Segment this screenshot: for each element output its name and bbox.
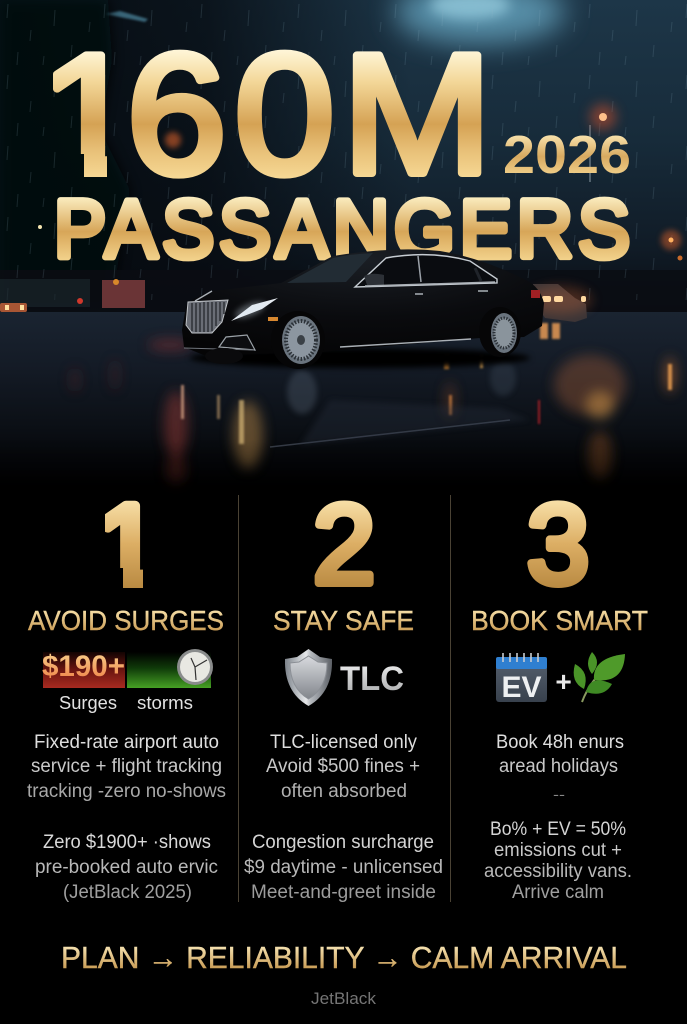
title: 160M: 1 [40,19,140,210]
text block: licensed only: Avoid $500 fines + [266,756,420,777]
label: tlc: TLC [340,660,404,698]
text block: congestion surcharge: Meet-and-greet inside [251,882,436,903]
text block: zero shows [35,832,218,903]
text block: zero shows: (JetBlack 2025) [63,882,192,903]
number 3: 3 [527,482,589,607]
text block: congestion surcharge [244,832,443,903]
panel: book smart [471,482,648,903]
text block: book ahead: Book 48h enurs [496,732,624,753]
title: 2026: 2026 [503,125,631,185]
car body [182,249,544,356]
text block: fixed-rate service: tracking -zero no-shows [27,781,226,802]
icon: calendar ev [496,653,547,704]
side windows [355,255,497,287]
text block: licensed only: TLC-licensed only [270,732,417,753]
headlight [231,298,278,321]
surge bar: $190+ [42,650,125,683]
title: 160M [53,50,482,179]
car shadow [190,348,530,368]
heading: stay safe: STAY SAFE [273,605,414,636]
windscreen [287,253,373,283]
mirror [364,274,384,285]
number 1: 1 [97,482,159,607]
black limousine [182,249,544,369]
text block: emissions [484,819,632,903]
text block: book ahead: aread holidays [499,756,618,777]
text block: zero shows: Zero $1900+ ·shows [43,832,211,853]
column dividers [238,495,450,902]
text block: fixed-rate service [27,732,226,802]
body highlights [195,282,495,347]
title: 160M: 60M [127,19,492,210]
surge bar [42,650,211,688]
text block: fixed-rate service: Fixed-rate airport auto [34,732,219,753]
text block: book ahead: -- [553,786,565,802]
front wheel [271,311,325,369]
rear wheel [479,307,521,357]
heading: avoid surges: AVOID SURGES [28,605,224,636]
title: PASSANGERS: PASSANGERS [54,183,630,274]
label: surges: Surges [59,693,117,713]
icon: leaf [574,652,625,702]
text block: emissions: accessibility vans. [484,861,632,882]
text block: congestion surcharge: $9 daytime - unlicensed [244,857,443,878]
text block: fixed-rate service: service + flight tracking [31,756,222,777]
icon: calendar ev: EV [501,671,542,704]
icon: clock [177,649,213,685]
grille [186,300,228,333]
background car with headlights [528,284,592,322]
label: storms: storms [137,693,193,713]
text block: emissions: Arrive calm [512,882,604,903]
heading: book smart: BOOK SMART [471,605,648,636]
text block: licensed only [266,732,420,802]
panel: stay safe [244,482,443,903]
icon: shield [285,649,332,706]
text block: book ahead [496,732,624,802]
text block: zero shows: pre-booked auto ervic [35,857,218,878]
far front wheel [205,348,243,364]
number 2: 2 [313,482,375,607]
plus sign: + [555,666,572,697]
text block: emissions: Bo% + EV = 50% [490,819,626,840]
lower intake [219,335,255,350]
brand footer: JetBlack [311,989,377,1008]
tagline: PLAN → RELIABILITY → CALM ARRIVAL [61,940,627,975]
text block: emissions: emissions cut + [494,840,622,861]
panel: avoid surges [27,482,226,903]
text block: licensed only: often absorbed [281,781,407,802]
text block: congestion surcharge: Congestion surcharge [252,832,434,853]
